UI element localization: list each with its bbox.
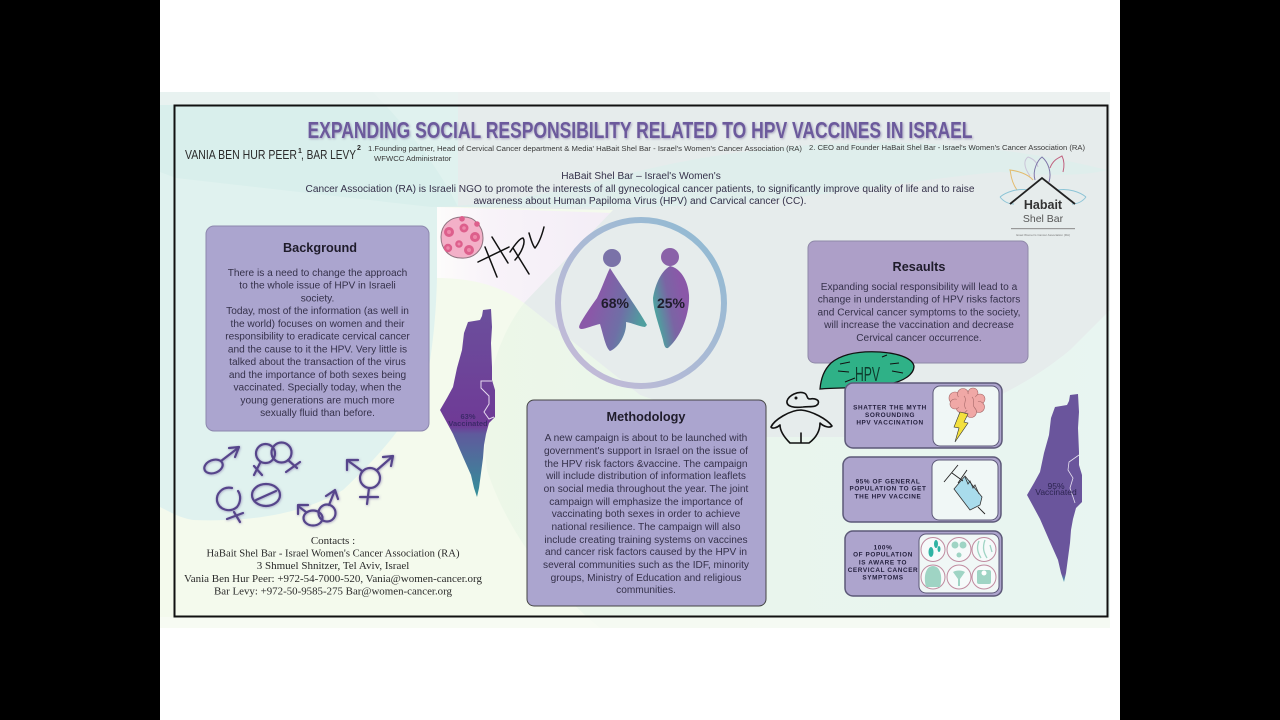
intro paragraph: awareness about Human Papiloma Virus (HPV) and Carvical cancer (CC). [474, 196, 806, 207]
text: contacts: Vania Ben Hur Peer: +972-54-7000-520, Vania@women-cancer.org [184, 573, 482, 585]
icon: double female [254, 442, 300, 475]
text: background body [225, 268, 410, 419]
panel: methodology [527, 400, 766, 606]
card: 100% aware of symptoms: SYMPTOMS [862, 574, 904, 582]
logo: Habait Shel Bar: Shel Bar [1023, 213, 1064, 225]
heading: background: Background [283, 241, 357, 255]
figure: 25%: 25% [657, 295, 686, 311]
text: contacts [184, 535, 482, 598]
text: methodology body: campaign will emphasize the importance of [549, 497, 743, 508]
text: background body: to the whole issue of HPV in Israeli [239, 281, 396, 292]
authors: VANIA BEN HUR PEER [185, 147, 297, 162]
figure: 68%: 68% [601, 295, 630, 311]
text: background body: responsibility to eradicate cervical cancer [225, 332, 410, 343]
text: results body: Cervical cancer occurrence. [856, 333, 982, 344]
chart: percentage ring [558, 220, 724, 386]
icon: speech bubble HPV [820, 352, 914, 389]
text: results body: will increase the vaccination and decrease [823, 320, 1014, 331]
icon: person [771, 392, 832, 443]
card: shatter the myth: SOROUNDING [865, 412, 915, 419]
map: Israel 63% vaccinated [440, 309, 495, 497]
text: contacts: HaBait Shel Bar - Israel Women's Cancer Association (RA) [206, 548, 460, 560]
panel: background [206, 226, 429, 431]
card: shatter the myth [845, 383, 1002, 448]
poster frame [174, 106, 1108, 616]
card: 100% aware of symptoms: CERVICAL CANCER [848, 567, 918, 574]
map: Israel 95% vaccinated: Vaccinated [1035, 487, 1077, 497]
text: background body: young generations are much more [240, 395, 395, 406]
text: methodology body: will include distribution of information leaflets [545, 471, 746, 482]
figure: 25% [653, 248, 689, 348]
affiliations: WFWCC Administrator [374, 154, 452, 163]
icon: syringe [944, 465, 985, 514]
authors [185, 145, 361, 162]
text: background body: Today, most of the information (as well in [226, 306, 409, 317]
text: methodology body: on social media throughout the year. The joint [544, 484, 749, 495]
icon: person with speech bubble [771, 352, 914, 443]
heading: results: Resaults [893, 260, 945, 274]
icon: neutral [252, 484, 280, 506]
affiliations: 2. CEO and Founder HaBait Shel Bar - Israel's Women's Cancer Association (RA) [809, 143, 1085, 152]
icon: HPV virus cell [441, 216, 483, 258]
icon: brain with lightning [949, 388, 985, 442]
card: 100% aware of symptoms: IS AWARE TO [859, 560, 907, 566]
title: EXPANDING SOCIAL RESPONSIBILITY RELATED TO HPV VACCINES IN ISRAEL [308, 118, 974, 144]
text: results body [818, 282, 1020, 344]
panel: results [808, 241, 1028, 363]
text: background body: and the cause to it the HPV. Very little is [228, 344, 407, 355]
text: background body: vaccinated. Specially today, when the [233, 383, 402, 394]
intro paragraph [306, 171, 975, 207]
intro paragraph: Cancer Association (RA) is Israeli NGO to promote the interests of all gynecological cancer patients, to significantly improve quality of life and to raise [306, 184, 975, 195]
icon: male [202, 447, 239, 476]
map: Israel 95% vaccinated [1027, 394, 1082, 582]
map: Israel 63% vaccinated: 63% [460, 412, 476, 421]
icon: female [217, 488, 243, 522]
text: contacts: Bar Levy: +972-50-9585-275 Bar@women-cancer.org [214, 586, 452, 598]
logo: Habait Shel Bar: Israel Women's Cancer Association (RA) [1016, 233, 1070, 237]
text: results body: and Cervical cancer symptoms to the society, [818, 307, 1020, 318]
text: background body: society. [301, 294, 334, 304]
text: methodology body: several communities such as the IDF, minority [543, 560, 750, 571]
text: results body: Expanding social responsibility will lead to a [821, 282, 1018, 293]
text: methodology body: include creating training systems on vaccines [544, 535, 748, 546]
intro paragraph: HaBait Shel Bar – Israel's Women's [561, 171, 721, 182]
text: methodology body: vaccinating both sexes in order to achieve [552, 509, 741, 520]
affiliations: 1.Founding partner, Head of Cervical Cancer department & Media' HaBait Shel Bar - Israel's Women's Cancer Association (RA) [368, 144, 802, 153]
map: Israel 63% vaccinated: Vaccinated [448, 419, 488, 428]
card: 95% to get vaccine: POPULATION TO GET [849, 486, 927, 492]
text: methodology body: communities. [616, 585, 676, 596]
heading: methodology: Methodology [607, 410, 685, 424]
card: 95% to get vaccine: 95% OF GENERAL [856, 478, 920, 486]
card: 100% aware of symptoms: 100% [874, 544, 892, 552]
text: background body: sexually fluid than before. [260, 408, 375, 419]
authors: 1 [298, 148, 302, 155]
authors: 2 [357, 145, 361, 152]
logo: Habait Shel Bar [1000, 156, 1086, 237]
card: 100% aware of symptoms [845, 531, 1002, 596]
icon: speech bubble HPV: HPV [855, 364, 880, 386]
text: background body: There is a need to change the approach [228, 268, 407, 279]
text: methodology body: groups, Ministry of Education and religious [551, 573, 741, 584]
text: methodology body [543, 433, 750, 596]
text: contacts: Contacts : [311, 535, 355, 547]
map: Israel 95% vaccinated: 95% [1047, 481, 1065, 491]
text: methodology body: A new campaign is about to be launched with [545, 433, 747, 444]
text: background body: the world) focuses on women and their [231, 319, 405, 330]
text: contacts: 3 Shmuel Shnitzer, Tel Aviv, Israel [257, 560, 409, 572]
card: 95% to get vaccine [843, 457, 1001, 522]
handwritten HPV [478, 227, 544, 277]
icon: gender symbols [202, 442, 393, 526]
title: EXPANDING SOCIAL RESPONSIBILITY RELATED TO HPV VACCINES IN ISRAEL [308, 117, 972, 143]
icon: transgender [347, 456, 393, 504]
text: methodology body: and cancer risk factors caused by the HPV in [545, 547, 747, 558]
affiliations [368, 143, 1085, 163]
text: results body: change in understanding of HPV risks factors [818, 295, 1020, 306]
text: methodology body: government's support in Israel on the issue of [544, 446, 748, 457]
text: methodology body: the HPV risk factors &vaccine. The campaign [545, 459, 747, 470]
card: 95% to get vaccine: THE HPV VACCINE [855, 494, 922, 500]
text: background body: talked about the transaction of the virus [229, 357, 406, 368]
logo: Habait Shel Bar: Habait [1024, 198, 1063, 212]
card: shatter the myth: HPV VACCINATION [856, 420, 924, 426]
authors: , BAR LEVY [301, 147, 356, 162]
icon: double male [298, 490, 338, 526]
icon grid: symptoms [921, 538, 996, 589]
text: background body: and the importance of both sexes being [229, 370, 406, 381]
poster background [160, 92, 1110, 628]
card: shatter the myth: SHATTER THE MYTH [853, 404, 927, 412]
text: methodology body: national resilience. The campaign will also [552, 522, 741, 533]
card: 100% aware of symptoms: OF POPULATION [853, 552, 913, 558]
figure: 68% [579, 249, 647, 351]
